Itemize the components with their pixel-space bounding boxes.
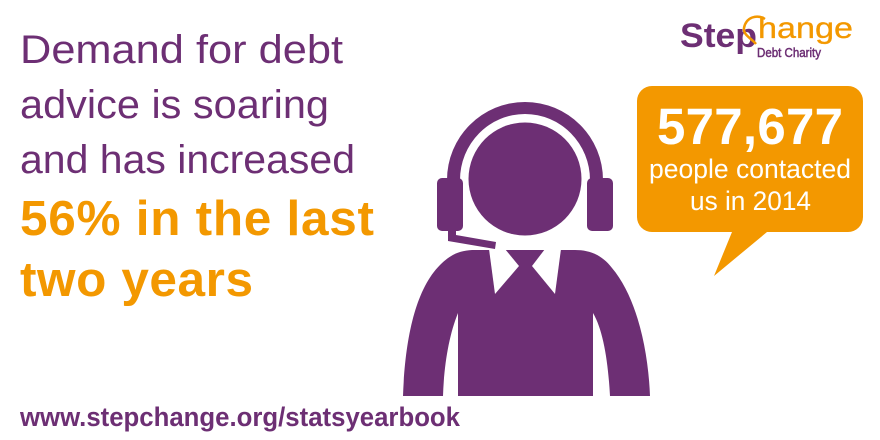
body [403, 250, 650, 396]
bubble caption: people contacted [649, 154, 851, 184]
bubble number: 577,677 [657, 98, 843, 155]
highlighted statistic: 56%: 56% in the last [20, 191, 374, 246]
highlighted statistic: 56%: two years [20, 252, 253, 307]
logo: StepChange Debt Charity: Debt Charity [757, 45, 821, 60]
website url: www.stepchange.org/statsyearbook [19, 402, 461, 432]
head [468, 122, 582, 236]
headband [447, 102, 603, 182]
shirt collar [489, 249, 561, 294]
bubble caption [649, 154, 851, 216]
icon: person with headset [403, 102, 650, 396]
heading: demand for debt advice: and has increased [20, 138, 355, 182]
left ear cup [437, 178, 463, 231]
logo: StepChange Debt Charity: hange [758, 12, 853, 45]
heading: demand for debt advice: Demand for debt [20, 28, 343, 72]
highlighted statistic: 56% [20, 191, 374, 307]
speech bubble [637, 86, 863, 276]
heading: demand for debt advice: advice is soaring [20, 83, 329, 127]
logo: StepChange Debt Charity: Step [680, 17, 757, 55]
bubble caption: us in 2014 [690, 186, 811, 216]
heading: demand for debt advice [20, 28, 355, 182]
logo: StepChange Debt Charity [680, 12, 853, 60]
microphone boom [448, 230, 496, 249]
right ear cup [587, 178, 613, 231]
